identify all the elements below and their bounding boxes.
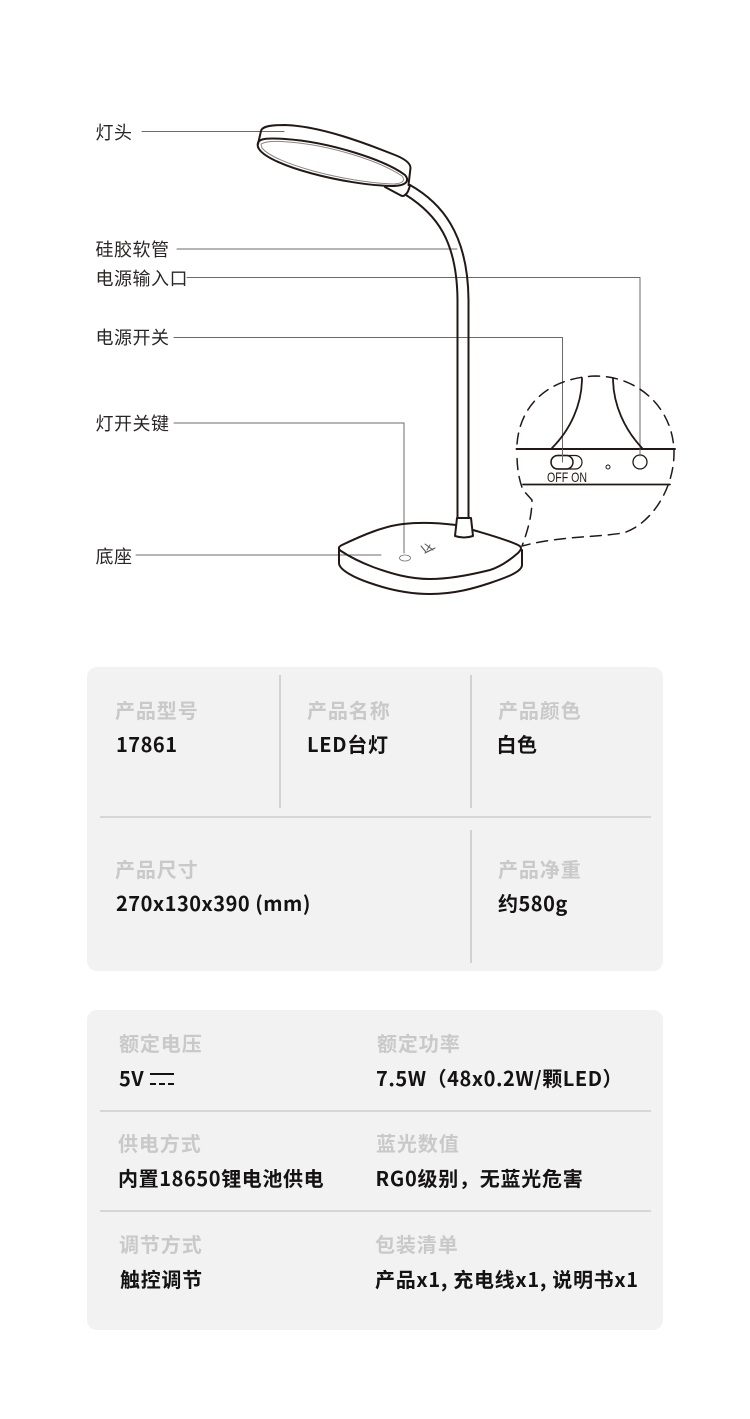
adjustment — [119, 1229, 203, 1293]
label: power switch: 电源开关 — [96, 324, 170, 350]
rated voltage — [119, 1028, 203, 1092]
lamp diagram — [136, 124, 676, 595]
label: lamp head: 灯头 — [96, 119, 132, 145]
power supply — [118, 1128, 324, 1192]
label: silicone hose: 硅胶软管 — [96, 236, 170, 262]
package contents: 产品x1, 充电线x1, 说明书x1 — [375, 1264, 639, 1293]
net weight: 产品净重 — [498, 854, 582, 883]
power supply: 内置18650锂电池供电 — [118, 1163, 324, 1192]
product name: 产品名称 — [307, 695, 391, 724]
switch labels: OFF ON — [547, 469, 587, 485]
blue light: 蓝光数值 — [376, 1128, 460, 1157]
rated voltage: 5V — [119, 1063, 144, 1092]
product size: 270x130x390 (mm) — [116, 888, 311, 917]
adjustment: 触控调节 — [120, 1264, 203, 1293]
power supply: 供电方式 — [118, 1128, 202, 1157]
rated voltage: 额定电压 — [119, 1028, 203, 1057]
gooseneck tube — [385, 185, 468, 518]
detail callout — [516, 376, 675, 546]
net weight: 约580g — [498, 888, 568, 917]
product colour: 产品颜色 — [498, 695, 582, 724]
blue light: RG0级别，无蓝光危害 — [376, 1163, 584, 1192]
lamp head — [258, 125, 410, 186]
product name — [307, 695, 391, 758]
label: power input: 电源输入口 — [96, 265, 188, 291]
product size — [115, 854, 311, 917]
label: base: 底座 — [96, 543, 132, 569]
product colour: 白色 — [496, 729, 538, 758]
product size: 产品尺寸 — [115, 854, 199, 883]
panel: product info — [87, 667, 663, 971]
panel: specifications — [87, 1010, 663, 1330]
adjustment: 调节方式 — [119, 1229, 203, 1258]
product colour — [496, 695, 582, 758]
lamp base — [339, 518, 522, 594]
rated power — [376, 1028, 623, 1092]
label: light switch key: 灯开关键 — [96, 410, 170, 436]
rated power: 额定功率 — [377, 1028, 461, 1057]
product name: LED台灯 — [307, 729, 389, 758]
leader lines — [136, 132, 640, 555]
rated power: 7.5W（48x0.2W/颗LED） — [376, 1063, 623, 1092]
package contents: 包装清单 — [375, 1229, 459, 1258]
blue light — [376, 1128, 584, 1192]
product model: 17861 — [116, 729, 178, 758]
product model: 产品型号 — [115, 695, 199, 724]
product model — [115, 695, 199, 758]
package contents — [375, 1229, 639, 1293]
net weight — [498, 854, 582, 917]
